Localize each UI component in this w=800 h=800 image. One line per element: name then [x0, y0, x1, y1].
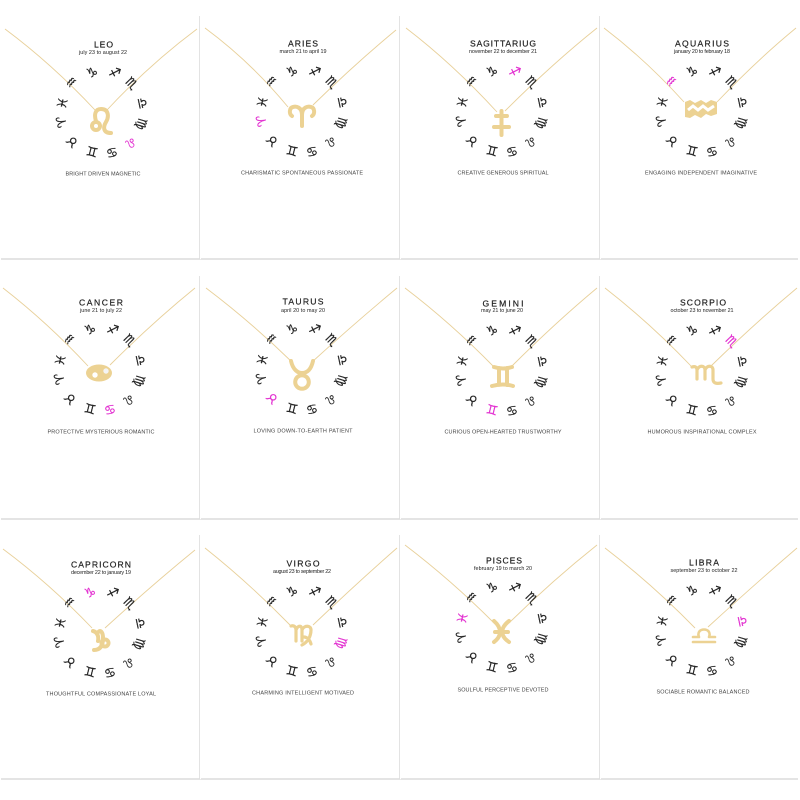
panel: Capricorn card — [0, 535, 200, 779]
zodiac ring: Leo highlighted: ♎︎ — [133, 96, 150, 111]
title: SCORPIO: SCORPIO — [680, 298, 726, 308]
date range: Cancer: june 21 to july 22 — [79, 308, 122, 314]
zodiac ring: Aquarius highlighted — [654, 63, 750, 159]
traits: Gemini: CURIOUS OPEN-HEARTED TRUSTWORTHY — [444, 430, 562, 436]
traits: Virgo: CHARMING INTELLIGENT MOTIVAED — [252, 691, 354, 697]
traits: Capricorn: THOUGHTFUL COMPASSIONATE LOYAL — [46, 692, 156, 698]
title: PISCES: PISCES — [486, 556, 522, 566]
zodiac ring: Leo highlighted: ♏︎ — [121, 75, 140, 93]
traits: Libra: SOCIABLE ROMANTIC BALANCED — [656, 689, 750, 695]
title: TAURUS: TAURUS — [282, 296, 324, 306]
zodiac ring: Gemini highlighted: ♈︎ — [454, 372, 471, 387]
icon: Aquarius pendant — [685, 100, 717, 118]
zodiac ring: Capricorn highlighted: ♐︎ — [105, 584, 120, 602]
zodiac ring: Leo highlighted: ♈︎ — [54, 114, 71, 129]
zodiac ring: Cancer highlighted: ♌︎ — [119, 389, 137, 408]
zodiac ring: Taurus highlighted: ♍︎ — [332, 372, 349, 388]
zodiac ring: Aquarius highlighted: ♋︎ — [704, 142, 719, 159]
zodiac ring: Capricorn highlighted: ♊︎ — [83, 662, 98, 679]
traits: Pisces: SOULFUL PERCEPTIVE DEVOTED — [458, 688, 549, 694]
zodiac ring: Libra highlighted: ♐︎ — [707, 582, 722, 600]
zodiac ring: Taurus highlighted: ♏︎ — [321, 331, 340, 350]
zodiac ring: Gemini highlighted: ♒︎ — [463, 332, 482, 350]
panel: Sagittarius card — [400, 16, 600, 259]
zodiac ring: Libra highlighted: ♋︎ — [704, 661, 719, 678]
zodiac ring: Virgo highlighted: ♓︎ — [255, 615, 272, 630]
zodiac ring: Scorpio highlighted: ♐︎ — [707, 322, 722, 340]
zodiac ring: Cancer highlighted: ♉︎ — [62, 389, 80, 407]
zodiac ring: Scorpio highlighted: ♑︎ — [685, 323, 700, 340]
zodiac ring: Pisces highlighted: ♑︎ — [485, 580, 500, 597]
zodiac ring: Sagittarius highlighted: ♒︎ — [463, 73, 482, 91]
zodiac ring: Aries highlighted: ♍︎ — [332, 115, 349, 131]
icon: Virgo pendant — [291, 626, 311, 645]
title: ARIES: ARIES — [288, 38, 318, 48]
date range: Leo: july 23 to august 22 — [78, 50, 127, 56]
title: CANCER: CANCER — [79, 298, 123, 308]
zodiac ring: Virgo highlighted: ♌︎ — [321, 651, 339, 670]
zodiac ring: Scorpio highlighted: ♏︎ — [721, 333, 740, 351]
panel: Aries card — [200, 16, 400, 259]
zodiac ring: Pisces highlighted: ♌︎ — [521, 647, 539, 666]
traits: Scorpio: HUMOROUS INSPIRATIONAL COMPLEX — [648, 430, 757, 436]
icon: Cancer pendant — [86, 364, 112, 382]
zodiac ring: Scorpio highlighted: ♌︎ — [721, 390, 739, 409]
zodiac ring: Taurus highlighted: ♌︎ — [321, 389, 339, 408]
zodiac ring: Libra highlighted: ♈︎ — [654, 632, 671, 647]
zodiac ring: Cancer highlighted: ♑︎ — [83, 322, 98, 339]
zodiac ring: Gemini highlighted: ♊︎ — [485, 400, 500, 417]
zodiac ring: Gemini highlighted: ♉︎ — [464, 390, 482, 408]
zodiac ring: Cancer highlighted: ♍︎ — [130, 373, 147, 389]
zodiac ring: Leo highlighted: ♒︎ — [63, 74, 82, 92]
zodiac ring: Sagittarius highlighted: ♉︎ — [464, 131, 482, 149]
zodiac ring: Scorpio highlighted: ♋︎ — [704, 401, 719, 418]
zodiac ring: Capricorn highlighted: ♈︎ — [52, 634, 69, 649]
title: LIBRA: LIBRA — [689, 558, 719, 568]
zodiac ring: Scorpio highlighted: ♓︎ — [655, 354, 672, 369]
zodiac ring: Sagittarius highlighted: ♏︎ — [521, 74, 540, 92]
zodiac ring: Sagittarius highlighted: ♐︎ — [507, 63, 522, 81]
panel: Pisces card — [400, 535, 600, 779]
zodiac ring: Leo highlighted: ♐︎ — [107, 64, 122, 82]
zodiac ring: Libra highlighted: ♌︎ — [721, 650, 739, 669]
zodiac ring: Libra highlighted: ♓︎ — [655, 614, 672, 629]
zodiac ring: Scorpio highlighted — [654, 322, 750, 418]
zodiac ring: Aries highlighted: ♊︎ — [285, 141, 300, 158]
zodiac ring: Aries highlighted: ♌︎ — [321, 131, 339, 150]
date range: Aries: march 21 to april 19 — [280, 49, 326, 55]
zodiac ring: Taurus highlighted: ♈︎ — [254, 370, 271, 386]
zodiac ring: Scorpio highlighted: ♒︎ — [663, 332, 682, 350]
zodiac ring: Leo highlighted: ♑︎ — [85, 65, 100, 82]
title: SAGITTARIUG: SAGITTARIUG — [470, 38, 536, 48]
zodiac ring: Aquarius highlighted: ♓︎ — [655, 95, 672, 110]
panel: Scorpio card — [600, 276, 800, 519]
zodiac ring: Libra highlighted: ♒︎ — [663, 592, 682, 610]
zodiac ring: Pisces highlighted: ♋︎ — [504, 658, 519, 675]
zodiac ring: Aries highlighted: ♒︎ — [263, 73, 282, 91]
panel: Leo card — [0, 16, 200, 259]
zodiac ring: Aquarius highlighted: ♉︎ — [664, 131, 682, 149]
panel: Gemini card — [400, 276, 600, 519]
panel: Libra card — [600, 535, 800, 779]
zodiac ring: Capricorn highlighted: ♏︎ — [119, 595, 138, 613]
zodiac ring: Capricorn highlighted: ♌︎ — [119, 652, 137, 671]
zodiac ring: Capricorn highlighted: ♓︎ — [53, 616, 70, 631]
zodiac ring: Libra highlighted: ♊︎ — [685, 660, 700, 677]
zodiac ring: Pisces highlighted: ♏︎ — [521, 590, 540, 608]
zodiac ring: Virgo highlighted: ♉︎ — [264, 651, 282, 669]
zodiac ring: Capricorn highlighted — [52, 584, 148, 680]
zodiac ring: Cancer highlighted: ♊︎ — [83, 399, 98, 416]
traits: Aries: CHARISMATIC SPONTANEOUS PASSIONATE — [241, 171, 363, 177]
zodiac ring: Libra highlighted: ♍︎ — [732, 634, 749, 650]
date range: Capricorn: december 22 to january 19 — [71, 570, 131, 576]
zodiac ring: Pisces highlighted: ♉︎ — [464, 647, 482, 665]
zodiac ring: Aquarius highlighted: ♎︎ — [733, 95, 750, 110]
zodiac ring: Taurus highlighted: ♋︎ — [304, 399, 319, 417]
icon: Scorpio pendant — [692, 366, 721, 383]
zodiac ring: Aries highlighted: ♓︎ — [255, 95, 272, 110]
title: CAPRICORN: CAPRICORN — [71, 560, 131, 570]
zodiac ring: Scorpio highlighted: ♉︎ — [664, 390, 682, 408]
zodiac ring: Cancer highlighted: ♓︎ — [53, 353, 70, 368]
zodiac ring: Aquarius highlighted: ♍︎ — [732, 115, 749, 131]
zodiac ring: Taurus highlighted: ♓︎ — [255, 353, 272, 367]
zodiac ring: Gemini highlighted: ♐︎ — [507, 322, 522, 340]
zodiac ring: Virgo highlighted — [254, 583, 350, 679]
date range: Gemini: may 21 to june 20 — [481, 308, 523, 314]
zodiac ring: Capricorn highlighted: ♉︎ — [62, 652, 80, 670]
zodiac ring: Gemini highlighted — [454, 322, 550, 418]
panel: Taurus card — [200, 276, 400, 519]
zodiac ring: Virgo highlighted: ♏︎ — [321, 594, 340, 612]
zodiac ring: Cancer highlighted: ♈︎ — [52, 371, 69, 386]
icon: Sagittarius pendant — [494, 111, 509, 135]
zodiac ring: Gemini highlighted: ♌︎ — [521, 390, 539, 409]
zodiac ring: Libra highlighted: ♏︎ — [721, 593, 740, 611]
traits: Sagittarius: CREATIVE GENEROUS SPIRITUAL — [458, 171, 548, 177]
zodiac ring: Virgo highlighted: ♊︎ — [285, 661, 300, 678]
zodiac ring: Sagittarius highlighted: ♍︎ — [532, 115, 549, 131]
zodiac ring: Capricorn highlighted: ♎︎ — [131, 616, 148, 631]
zodiac ring: Leo highlighted — [54, 64, 150, 160]
zodiac ring: Leo highlighted: ♋︎ — [104, 143, 119, 160]
zodiac ring: Leo highlighted: ♉︎ — [64, 132, 82, 150]
zodiac ring: Leo highlighted: ♌︎ — [121, 132, 139, 151]
traits: Cancer: PROTECTIVE MYSTERIOUS ROMANTIC — [48, 430, 155, 436]
zodiac ring: Sagittarius highlighted: ♑︎ — [485, 64, 500, 81]
zodiac ring: Taurus highlighted: ♐︎ — [307, 321, 322, 339]
zodiac ring: Aries highlighted — [254, 63, 350, 159]
zodiac ring: Cancer highlighted: ♒︎ — [61, 331, 80, 349]
zodiac ring: Sagittarius highlighted — [454, 63, 550, 159]
icon: Leo pendant — [92, 109, 111, 133]
zodiac ring: Sagittarius highlighted: ♊︎ — [485, 141, 500, 158]
panel: Virgo card — [200, 535, 400, 779]
date range: Pisces: february 19 to march 20 — [474, 566, 532, 572]
zodiac ring: Aries highlighted: ♐︎ — [307, 63, 322, 81]
zodiac ring: Taurus highlighted: ♎︎ — [333, 353, 350, 367]
zodiac ring: Aries highlighted: ♋︎ — [304, 142, 319, 159]
zodiac ring: Pisces highlighted: ♍︎ — [532, 631, 549, 647]
zodiac ring: Cancer highlighted: ♏︎ — [119, 332, 138, 350]
zodiac ring: Sagittarius highlighted: ♎︎ — [533, 95, 550, 110]
zodiac ring: Virgo highlighted: ♐︎ — [307, 583, 322, 601]
zodiac ring: Pisces highlighted: ♎︎ — [533, 611, 550, 626]
zodiac ring: Virgo highlighted: ♒︎ — [263, 593, 282, 611]
zodiac ring: Virgo highlighted: ♈︎ — [254, 633, 271, 648]
zodiac ring: Pisces highlighted: ♊︎ — [485, 657, 500, 674]
zodiac ring: Gemini highlighted: ♋︎ — [504, 401, 519, 418]
zodiac ring: Cancer highlighted: ♋︎ — [102, 400, 117, 417]
date range: Taurus: april 20 to may 20 — [281, 308, 325, 314]
zodiac ring: Scorpio highlighted: ♈︎ — [654, 372, 671, 387]
date range: Scorpio: october 23 to november 21 — [670, 308, 734, 314]
date range: Aquarius: january 20 to february 18 — [673, 49, 730, 55]
zodiac ring: Taurus highlighted: ♒︎ — [263, 330, 282, 349]
zodiac ring: Pisces highlighted: ♐︎ — [507, 579, 522, 597]
zodiac ring: Taurus highlighted: ♉︎ — [264, 388, 282, 407]
zodiac ring: Taurus highlighted: ♑︎ — [285, 321, 300, 339]
zodiac ring: Scorpio highlighted: ♊︎ — [685, 400, 700, 417]
zodiac ring: Libra highlighted — [654, 582, 750, 678]
zodiac ring: Gemini highlighted: ♓︎ — [455, 354, 472, 369]
zodiac ring: Aquarius highlighted: ♊︎ — [685, 141, 700, 158]
panel: Cancer card — [0, 276, 200, 519]
zodiac ring: Cancer highlighted: ♎︎ — [131, 353, 148, 368]
zodiac ring: Aries highlighted: ♏︎ — [321, 74, 340, 92]
zodiac ring: Pisces highlighted — [454, 579, 550, 675]
zodiac ring: Virgo highlighted: ♑︎ — [285, 584, 300, 601]
zodiac ring: Capricorn highlighted: ♋︎ — [102, 663, 117, 680]
traits: Taurus: LOVING DOWN-TO-EARTH PATIENT — [254, 429, 353, 435]
zodiac ring: Leo highlighted: ♓︎ — [55, 96, 72, 111]
zodiac ring: Aries highlighted: ♈︎ — [254, 113, 271, 128]
zodiac ring: Libra highlighted: ♎︎ — [733, 614, 750, 629]
date range: Sagittarius: november 22 to december 21 — [469, 49, 537, 55]
zodiac ring: Aries highlighted: ♎︎ — [333, 95, 350, 110]
zodiac ring: Capricorn highlighted: ♍︎ — [130, 636, 147, 652]
zodiac ring: Gemini highlighted: ♑︎ — [485, 323, 500, 340]
zodiac ring: Pisces highlighted: ♓︎ — [455, 611, 472, 626]
zodiac ring: Leo highlighted: ♊︎ — [85, 142, 100, 159]
zodiac ring: Capricorn highlighted: ♒︎ — [61, 594, 80, 612]
zodiac ring: Cancer highlighted — [52, 321, 148, 417]
date range: Virgo: august 23 to september 22 — [273, 569, 331, 575]
panel: Aquarius card — [600, 16, 800, 259]
zodiac ring: Aquarius highlighted: ♈︎ — [654, 113, 671, 128]
zodiac ring: Aquarius highlighted: ♏︎ — [721, 74, 740, 92]
title: VIRGO: VIRGO — [286, 558, 320, 568]
icon: Taurus pendant — [291, 361, 313, 389]
zodiac ring: Pisces highlighted: ♒︎ — [463, 589, 482, 607]
zodiac ring: Scorpio highlighted: ♍︎ — [732, 374, 749, 390]
icon: Capricorn pendant — [93, 631, 108, 650]
zodiac ring: Taurus highlighted: ♊︎ — [285, 398, 300, 416]
zodiac ring: Libra highlighted: ♉︎ — [664, 650, 682, 668]
icon: Gemini pendant — [492, 367, 513, 386]
zodiac ring: Aries highlighted: ♉︎ — [264, 131, 282, 149]
zodiac ring: Gemini highlighted: ♍︎ — [532, 374, 549, 390]
zodiac ring: Sagittarius highlighted: ♌︎ — [521, 131, 539, 150]
date range: Libra: september 23 to october 22 — [670, 568, 738, 574]
title: AQUARIUS: AQUARIUS — [675, 38, 729, 48]
zodiac ring: Sagittarius highlighted: ♋︎ — [504, 142, 519, 159]
zodiac ring: Virgo highlighted: ♋︎ — [304, 662, 319, 679]
icon: Libra pendant — [693, 630, 715, 642]
zodiac ring: Libra highlighted: ♑︎ — [685, 583, 700, 600]
title: GEMINI: GEMINI — [482, 298, 524, 308]
zodiac ring: Gemini highlighted: ♏︎ — [521, 333, 540, 351]
zodiac ring: Gemini highlighted: ♎︎ — [533, 354, 550, 369]
icon: Aries pendant — [290, 107, 314, 126]
zodiac ring: Aquarius highlighted: ♒︎ — [663, 73, 682, 91]
zodiac ring: Leo highlighted: ♍︎ — [132, 116, 149, 132]
icon: Pisces pendant — [494, 621, 509, 642]
zodiac ring: Capricorn highlighted: ♑︎ — [83, 585, 98, 602]
zodiac ring: Scorpio highlighted: ♎︎ — [733, 354, 750, 369]
zodiac ring: Virgo highlighted: ♎︎ — [333, 615, 350, 630]
zodiac ring: Taurus highlighted — [254, 321, 350, 417]
zodiac ring: Virgo highlighted: ♍︎ — [332, 635, 349, 651]
zodiac ring: Cancer highlighted: ♐︎ — [105, 321, 120, 339]
zodiac ring: Sagittarius highlighted: ♈︎ — [454, 113, 471, 128]
traits: Leo: BRIGHT DRIVEN MAGNETIC — [66, 172, 141, 178]
traits: Aquarius: ENGAGING INDEPENDENT IMAGINATIVE — [645, 171, 757, 177]
title: LEO: LEO — [94, 40, 113, 50]
zodiac ring: Aquarius highlighted: ♑︎ — [685, 64, 700, 81]
zodiac ring: Aquarius highlighted: ♌︎ — [721, 131, 739, 150]
zodiac ring: Pisces highlighted: ♈︎ — [454, 629, 471, 644]
zodiac ring: Sagittarius highlighted: ♓︎ — [455, 95, 472, 110]
zodiac ring: Aquarius highlighted: ♐︎ — [707, 63, 722, 81]
zodiac ring: Aries highlighted: ♑︎ — [285, 64, 300, 81]
